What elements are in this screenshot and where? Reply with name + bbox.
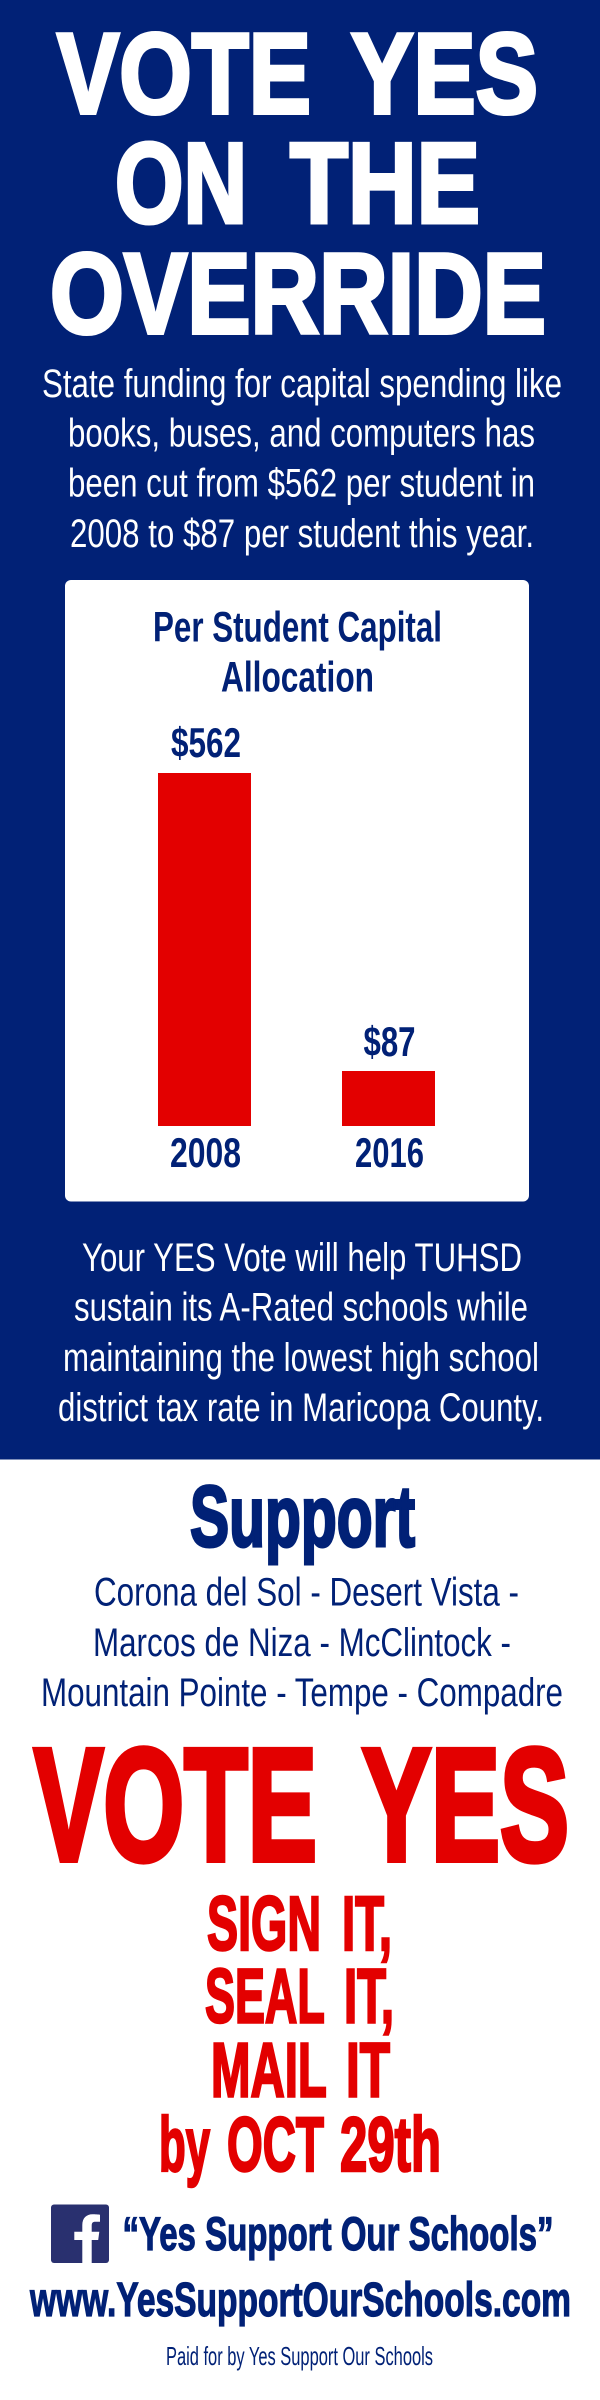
value label: $562: $562 [171,719,241,766]
bar: 2008 [158,719,251,1176]
text block: sign it seal it mail it: MAIL [211,2028,326,2114]
text block: sign it seal it mail it: SIGN [207,1881,321,1967]
icon: facebook [51,2204,109,2263]
text: paid for by: Paid for by Yes Support Our Schools [166,2341,433,2371]
text block: sign it seal it mail it [159,1881,441,2188]
title: THE [290,121,480,248]
chart title [153,604,442,701]
panel: bar chart card [65,580,529,1202]
text block: sign it seal it mail it: 29th [340,2102,441,2188]
text block: sign it seal it mail it: IT, [342,1881,392,1967]
title: YES [351,11,538,138]
text block: sign it seal it mail it: SEAL [205,1953,324,2039]
text block: state funding [42,362,562,556]
text block: sign it seal it mail it: IT, [344,1953,394,2039]
title: ON [115,121,247,248]
text block: schools list [41,1571,563,1715]
year label: 2016: 2016 [355,1129,424,1176]
title: VOTE [57,11,311,138]
heading: vote yes: VOTE [34,1715,317,1894]
text block: sign it seal it mail it: IT [346,2028,390,2114]
year label: 2008: 2008 [170,1129,241,1176]
text block: your yes vote [58,1236,544,1430]
title [50,11,546,358]
heading: support: Support [190,1469,415,1565]
panel: blue upper section [0,0,600,1460]
chart title: Per Student Capital [153,604,442,652]
bar: 2016 [342,1018,435,1176]
chart title: Allocation [221,653,374,701]
text block: sign it seal it mail it: OCT [227,2102,324,2188]
value label: $87: $87 [364,1018,416,1065]
text block: sign it seal it mail it: by [159,2102,210,2188]
